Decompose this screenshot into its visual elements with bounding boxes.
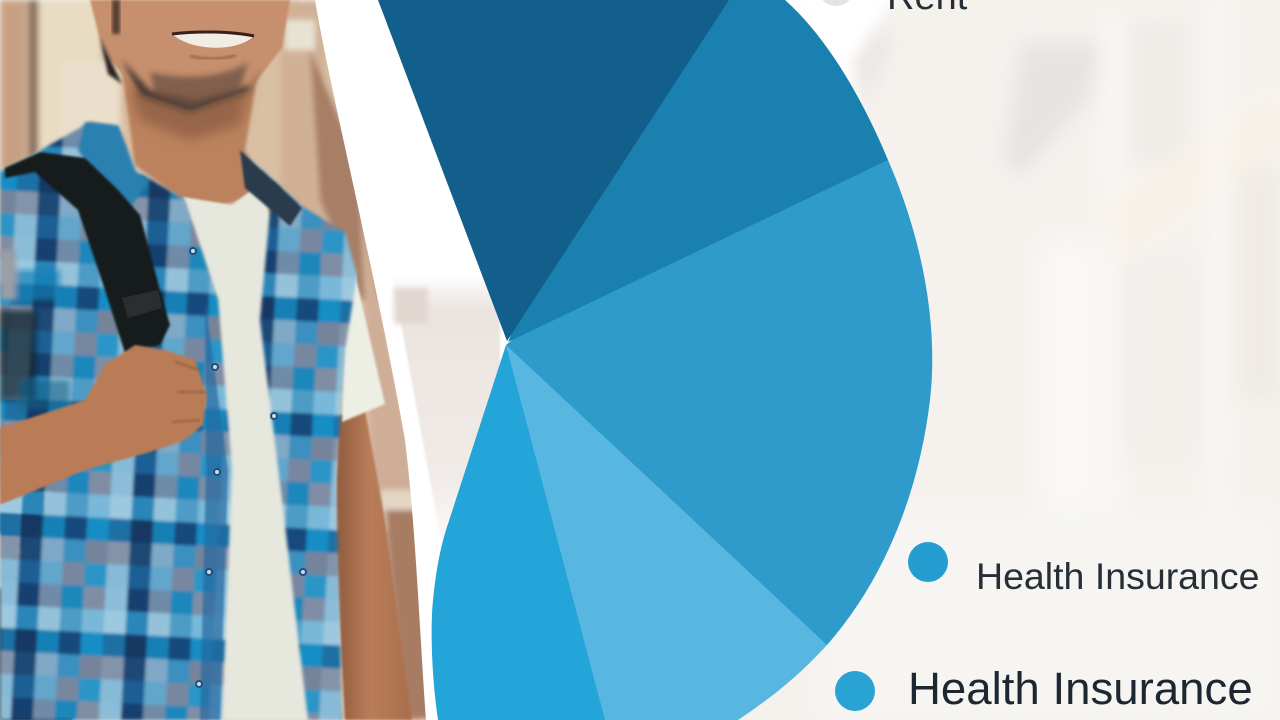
legend dot: rent [818,0,854,6]
smile [172,32,254,59]
backpack strap [5,152,170,353]
backpack body [0,586,74,720]
plaid shirt left panel [0,122,232,720]
slice: rent (dark blue) [378,0,729,341]
photo background: street buildings [0,0,440,720]
shirt plackets [200,150,302,720]
slice: bright blue [432,345,700,720]
legend: health insurance upper [908,542,1260,597]
head [90,0,290,113]
legend: rent [818,0,968,18]
t-shirt sleeve [342,270,385,422]
faded street panel [392,275,500,565]
slice: second blue [508,0,888,342]
photo: student with backpack [0,0,440,720]
knuckle lines [172,362,206,422]
pie chart [378,0,932,720]
hair and beard shadow [100,0,262,113]
legend: health insurance lower [835,663,1253,714]
shirt buttons [190,248,306,687]
slice: mid blue [506,100,932,645]
legend label: upper: Health Insurance [976,555,1260,597]
collar left [78,122,148,208]
white swoosh band [300,0,880,720]
strap buckle [122,290,162,318]
arm and hand [0,345,207,505]
slice: light blue [506,345,827,720]
chin shadow on neck [130,85,250,140]
white glow near pie top [790,0,900,130]
shirt shadow patches [0,250,70,410]
plaid shirt right panel [240,150,357,720]
legend dot: lower [835,671,875,711]
right arm [335,410,412,720]
lower sleeve cuff [0,492,50,554]
legend dot: upper [908,542,948,582]
neck [122,70,268,205]
white t-shirt [183,185,312,720]
legend label: lower: Health Insurance [908,663,1253,714]
background: faded building [790,0,1280,720]
